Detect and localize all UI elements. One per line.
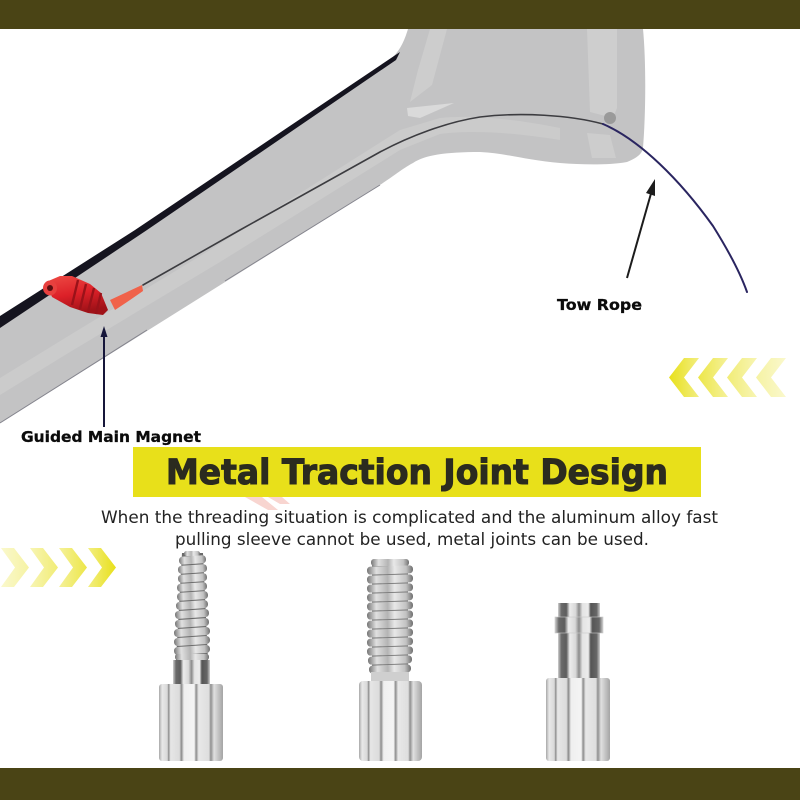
description text: When the threading situation is complicated and the aluminum alloy fast: [101, 508, 719, 527]
magnet body: [46, 276, 108, 315]
metal joint 2: threaded bolt: [359, 559, 422, 761]
description text: [101, 508, 719, 549]
label: Guided Main Magnet: Guided Main Magnet: [21, 428, 201, 446]
arrow: magnet callout: [100, 326, 108, 427]
bottom bar: [0, 768, 800, 800]
notch: [604, 112, 616, 124]
metal joint 3: smooth barrel: [546, 603, 610, 761]
body highlights: [0, 29, 617, 395]
red guided magnet: [43, 276, 143, 315]
black groove edge: [0, 52, 400, 328]
title: Metal Traction Joint Design: [166, 453, 668, 493]
connector sleeve: [110, 285, 143, 310]
label: Tow Rope: Tow Rope: [557, 296, 642, 314]
tool body: grey threader handle: [0, 29, 645, 423]
title band: [133, 447, 701, 497]
chevrons: left side pointing right: [1, 548, 116, 587]
arrow: tow rope callout: [627, 179, 655, 278]
tow rope: [143, 115, 747, 292]
lower edge line: [0, 185, 380, 423]
description text: pulling sleeve cannot be used, metal joints can be used.: [175, 530, 649, 549]
faint red chevrons behind description: [245, 497, 290, 510]
top bar: [0, 0, 800, 29]
chevrons: right side pointing left: [669, 358, 786, 397]
metal joint 1: tapered screw: [159, 551, 223, 761]
